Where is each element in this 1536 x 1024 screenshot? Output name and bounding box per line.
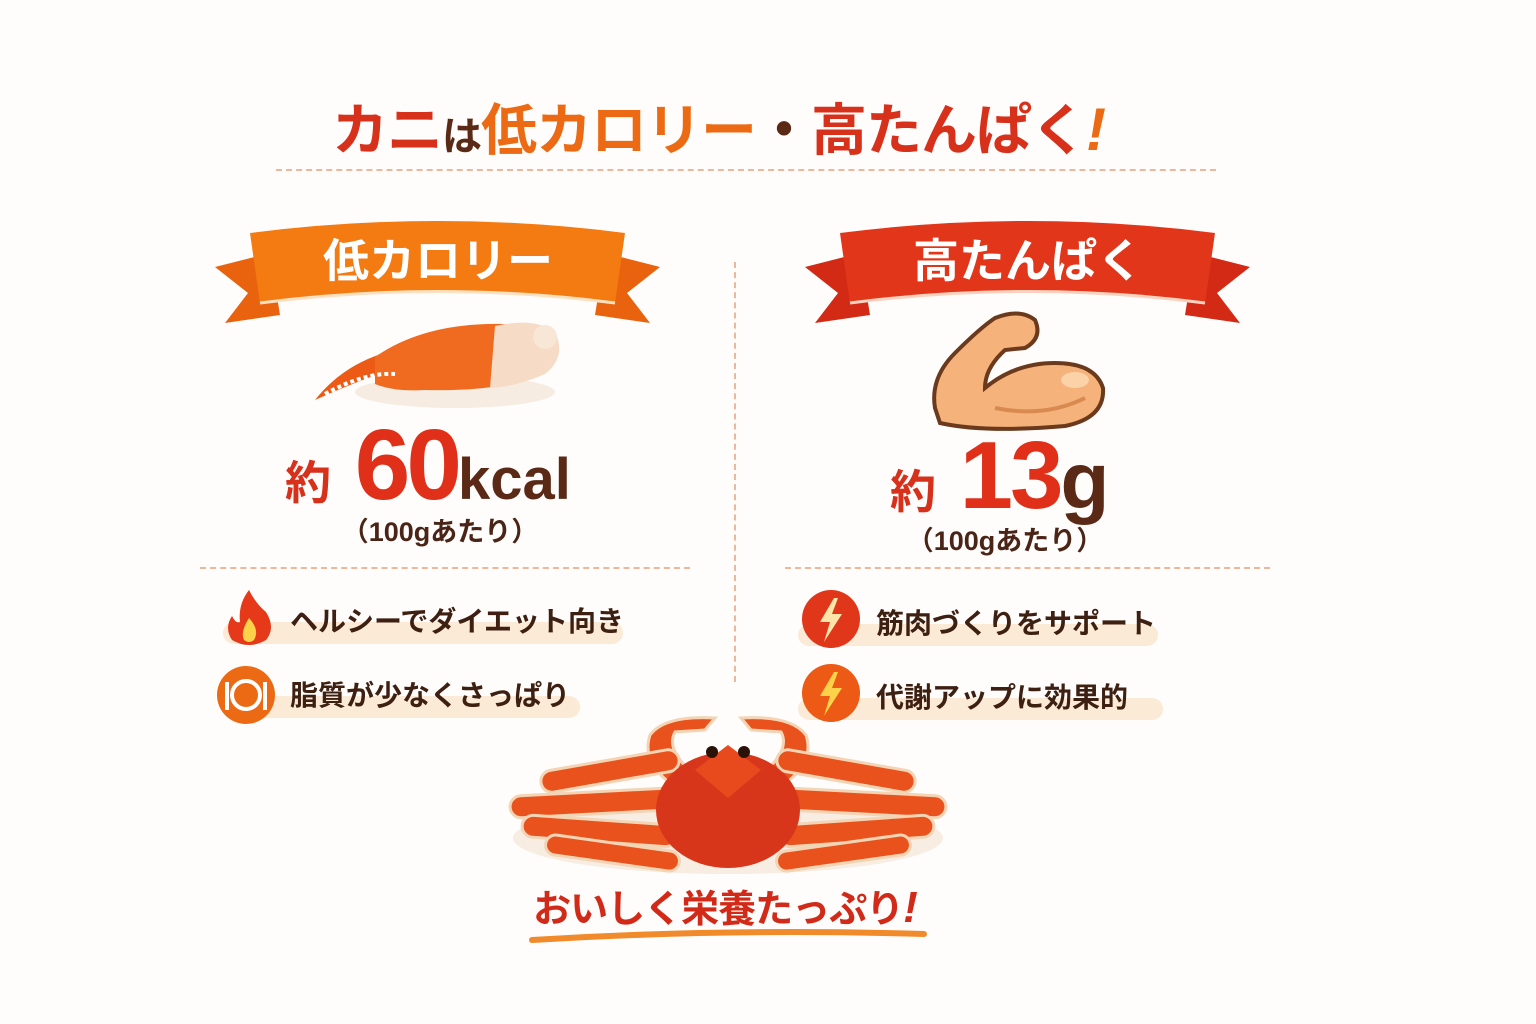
banner: low calorie [215,221,660,323]
icon: lightning red [802,590,860,648]
caption left: （100gあたり） [342,517,538,547]
item: healthy diet: ヘルシーでダイエット向き [290,606,624,637]
item: metabolism: 代謝アップに効果的 [876,682,1128,713]
item: metabolism [798,664,1163,722]
icon: crab leg [315,322,560,408]
icon: lightning orange [802,664,860,722]
title: カニは低カロリー・高たんぱく! [332,96,1105,163]
item: muscle support: 筋肉づくりをサポート [876,608,1156,639]
item: low fat [217,666,580,724]
vertical divider [734,262,736,682]
item: low fat: 脂質が少なくさっぱり [290,680,570,711]
icon: flame [228,590,271,645]
banner: high protein: 高たんぱく [913,235,1143,287]
illustration: crab [508,716,948,874]
icon: plate [217,666,275,724]
stat: protein: 約 13g [890,422,1109,529]
closing message: おいしく栄養たっぷり! [533,883,917,932]
icon: flexed arm [932,312,1106,431]
stat: calories: 約 60kcal [285,409,571,521]
banner: low calorie: 低カロリー [323,235,553,287]
banner: high protein [805,221,1250,323]
item: muscle support [798,590,1158,648]
caption right: （100gあたり） [907,526,1103,556]
underline swash [529,929,927,943]
item: healthy diet [223,590,624,645]
